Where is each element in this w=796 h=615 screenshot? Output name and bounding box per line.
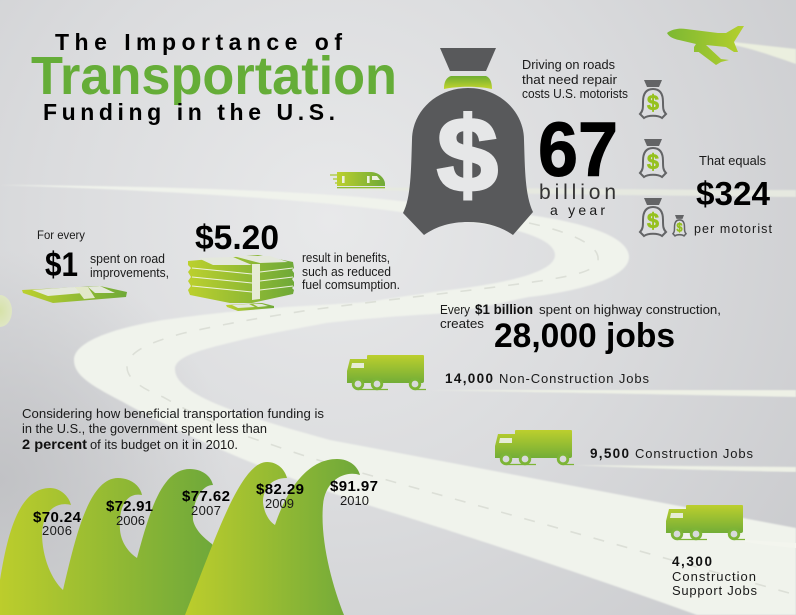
value 2006 second: $72.91 [106, 498, 153, 515]
text: jobs headline: $1 billion [475, 302, 533, 317]
text: for every $1 [37, 228, 169, 284]
truck road line 3 [730, 539, 796, 548]
value 2006: 2006 [42, 523, 72, 538]
value 2007: 2007 [191, 503, 221, 518]
icon: partial money bag [673, 215, 686, 236]
value 2006 [33, 509, 82, 538]
title line 3: Funding in the U.S. [43, 99, 335, 125]
text: result in benefits: fuel comsumption. [302, 278, 400, 292]
icon: small money bag 3 [640, 198, 666, 236]
icon: stack of money [188, 255, 294, 303]
text: budget note: of its budget on it in 2010. [90, 437, 238, 452]
icon: large money bag: $ [437, 96, 498, 214]
icon: single money bundle [22, 286, 127, 303]
text: jobs headline: spent on highway construction, [539, 303, 721, 317]
text: budget note [22, 406, 324, 452]
value 2010: $91.97 [330, 478, 378, 495]
label: 14,000 jobs: 14,000 [445, 371, 493, 386]
text: $324 per motorist [694, 154, 773, 236]
plane contrail [733, 42, 796, 64]
icon: truck 2 [495, 430, 574, 464]
icon: small money bag 2 [640, 139, 666, 177]
highway light streak [326, 187, 796, 197]
stat: 67 billion a year: 67 [538, 107, 618, 193]
value 2006 second [106, 498, 153, 528]
value 2007 [182, 488, 230, 518]
text: driving costs: Driving on roads [522, 58, 615, 72]
icon: truck 1 [347, 355, 426, 390]
chart: front waves [185, 459, 360, 615]
icon: small money bag 2: $ [647, 151, 659, 174]
value 2009: $82.29 [256, 481, 304, 498]
text: driving costs: costs U.S. motorists [522, 87, 628, 101]
chart labels: yearly spending [33, 478, 378, 538]
text: result in benefits: result in benefits, [302, 251, 390, 265]
winding road [0, 185, 796, 615]
text: for every $1: For every [37, 228, 85, 242]
title [31, 29, 397, 125]
stat: 67 billion a year: billion [539, 181, 616, 204]
text: driving costs: that need repair [522, 73, 617, 87]
text: jobs headline: 28,000 jobs [494, 317, 675, 355]
value 2010 [330, 478, 378, 508]
title line 1: The Importance of [55, 29, 342, 55]
green glow at left edge [0, 295, 12, 327]
text: driving costs [522, 58, 628, 101]
text: budget note: 2 percent [22, 436, 87, 452]
value 2009: 2009 [265, 496, 294, 511]
icon: truck 3 [666, 505, 745, 540]
stat: 67 billion a year: a year [550, 202, 605, 218]
road centre dashes [127, 223, 796, 595]
icon: small money bag 1 [640, 80, 666, 118]
icon: train [330, 172, 385, 188]
label: 9,500 jobs: 9,500 [590, 446, 629, 461]
icon: large money bag [403, 48, 533, 235]
icon: small money bundle [226, 303, 274, 311]
stat: $5.20: $5.20 [195, 219, 279, 257]
text: jobs headline: creates [440, 317, 484, 331]
label: 9,500 jobs: Construction Jobs [635, 446, 754, 461]
truck road line 1 [430, 390, 796, 397]
label: 4,300 jobs: 4,300 [672, 554, 712, 569]
label: 4,300 jobs [672, 554, 758, 598]
label: 4,300 jobs: Construction [672, 569, 756, 584]
value 2010: 2010 [340, 493, 369, 508]
text: budget note: Considering how beneficial transportation funding is [22, 406, 324, 421]
chart: back waves [0, 469, 240, 615]
value 2009 [256, 481, 304, 511]
value 2006: $70.24 [33, 509, 82, 526]
label: 14,000 jobs: Non-Construction Jobs [499, 371, 650, 386]
text: $324 per motorist: $324 [696, 175, 771, 212]
text: budget note: in the U.S., the government spent less than [22, 421, 267, 436]
title line 2: Transportation [31, 46, 397, 106]
icon: small money bag 3: $ [647, 210, 659, 233]
value 2007: $77.62 [182, 488, 230, 505]
icon: small money bag 1: $ [647, 92, 659, 115]
text: $324 per motorist: per motorist [694, 222, 773, 236]
label: 4,300 jobs: Support Jobs [672, 583, 758, 598]
text: for every $1: spent on road [90, 252, 165, 266]
text: jobs headline [440, 302, 721, 355]
icon: airplane [667, 26, 744, 65]
truck road line 2 [575, 465, 796, 472]
text: result in benefits [302, 251, 400, 292]
value 2006 second: 2006 [116, 513, 145, 528]
text: result in benefits: such as reduced [302, 265, 391, 279]
icon: partial money bag: $ [676, 222, 682, 235]
text: for every $1: improvements, [90, 266, 169, 280]
text: $324 per motorist: That equals [699, 154, 766, 168]
text: jobs headline: Every [440, 303, 471, 317]
text: for every $1: $1 [45, 246, 78, 284]
